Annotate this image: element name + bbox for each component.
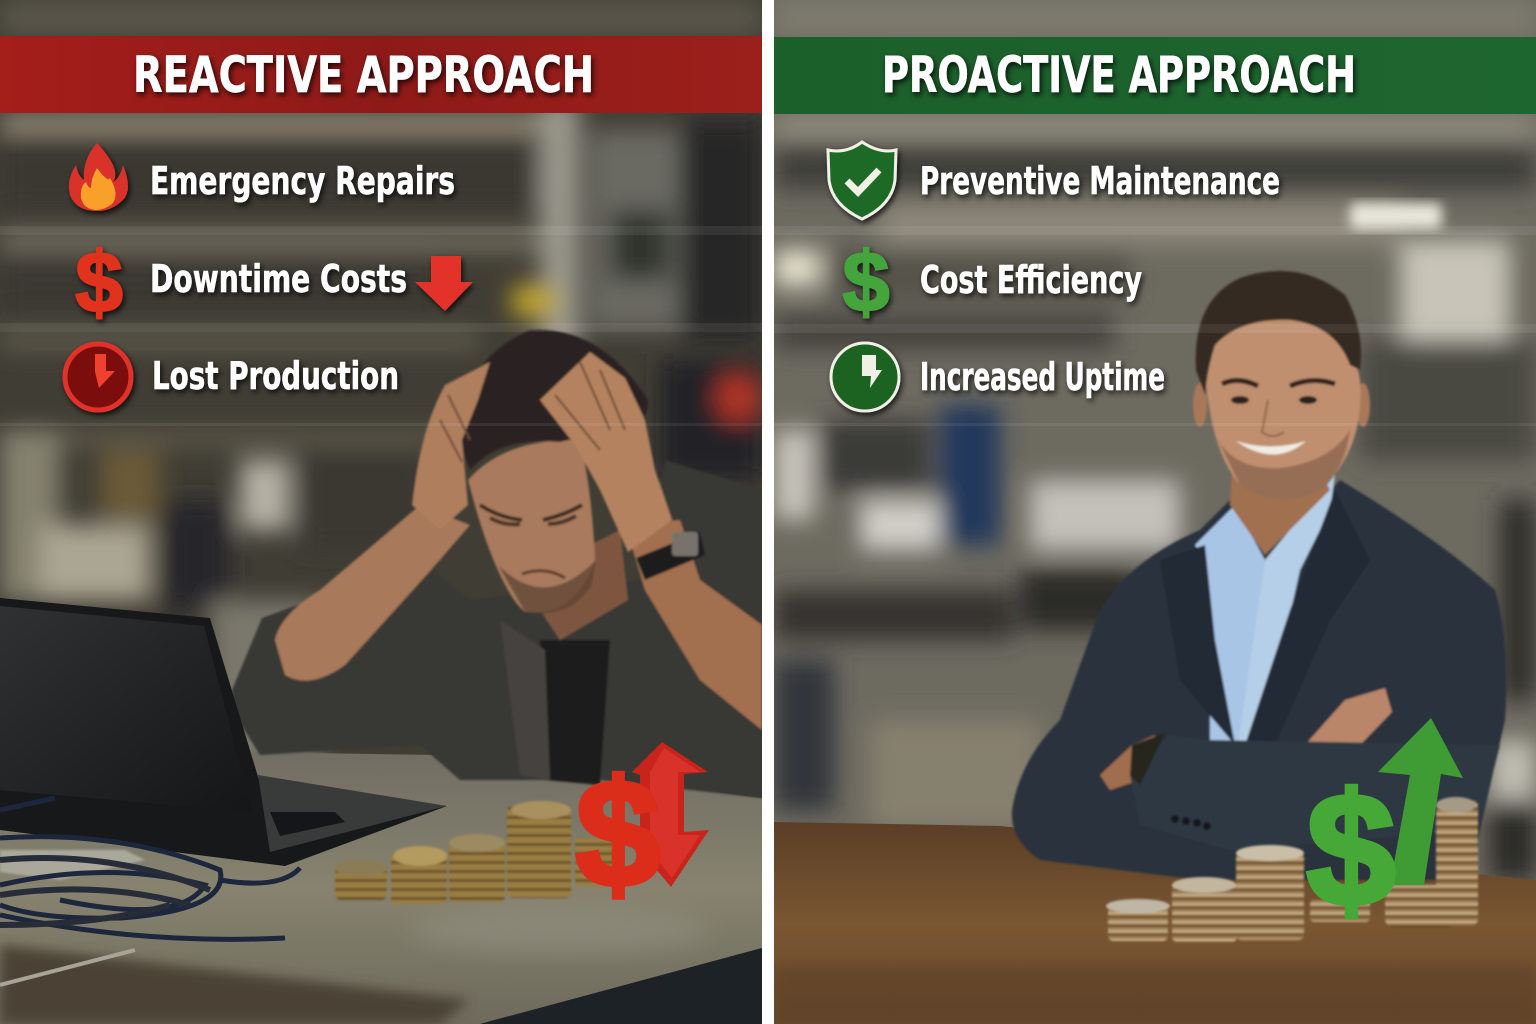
neck [1230,470,1330,555]
faint horizontal bands [0,226,1536,426]
blurred factory background (left) [0,0,762,1024]
icon: falling dollar and arrows: $ [576,749,660,919]
blazer [1012,480,1506,880]
watch [636,532,705,580]
icon: red down arrow [415,256,473,311]
stressed man [232,330,762,798]
icon: rising dollar and arrow [1307,718,1463,939]
arm left [275,505,470,681]
right hand [540,352,672,552]
crossed arms [1305,688,1392,745]
arm right [625,520,762,730]
icon: uptime clock [831,343,899,411]
panel: reactive approach [0,0,762,1024]
label: emergency repairs: Emergency Repairs [150,159,455,203]
confident man [1012,271,1506,880]
heading: proactive approach: PROACTIVE APPROACH [882,46,1356,104]
hair [1196,271,1361,395]
panel: proactive approach [774,0,1536,1024]
icon: green dollar: $ [842,235,890,330]
icon: flame [69,143,128,211]
banner: proactive [774,37,1536,114]
left hand [412,362,490,530]
icon: falling dollar and arrows [576,742,709,919]
icon: lost production clock [65,344,131,410]
laptop [0,598,447,866]
label: downtime costs: Downtime Costs [150,257,407,301]
divider [762,0,774,1024]
face [1205,312,1360,500]
coin stacks (reactive) [334,801,615,904]
shirt and torso [232,460,762,798]
table: wood desk [774,822,1536,1024]
icon: red dollar: $ [75,235,123,331]
heading: reactive approach: REACTIVE APPROACH [133,46,594,104]
cables and papers [0,798,300,985]
ears [1193,383,1207,427]
label: increased uptime: Increased Uptime [920,355,1165,399]
label: lost production: Lost Production [152,354,399,398]
icon: green shield [828,142,896,219]
label: preventive maintenance: Preventive Maintenance [920,159,1280,203]
table: concrete workbench [0,752,762,1024]
blurred factory background (right) [774,0,1536,880]
icon: rising dollar and arrow: $ [1307,760,1395,939]
coin stacks (proactive) [1106,797,1478,942]
watch [1130,733,1165,785]
neck [542,530,630,641]
label: cost efficiency: Cost Efficiency [920,258,1142,302]
face [468,440,595,613]
hair [458,330,648,470]
banner: reactive [0,36,762,113]
